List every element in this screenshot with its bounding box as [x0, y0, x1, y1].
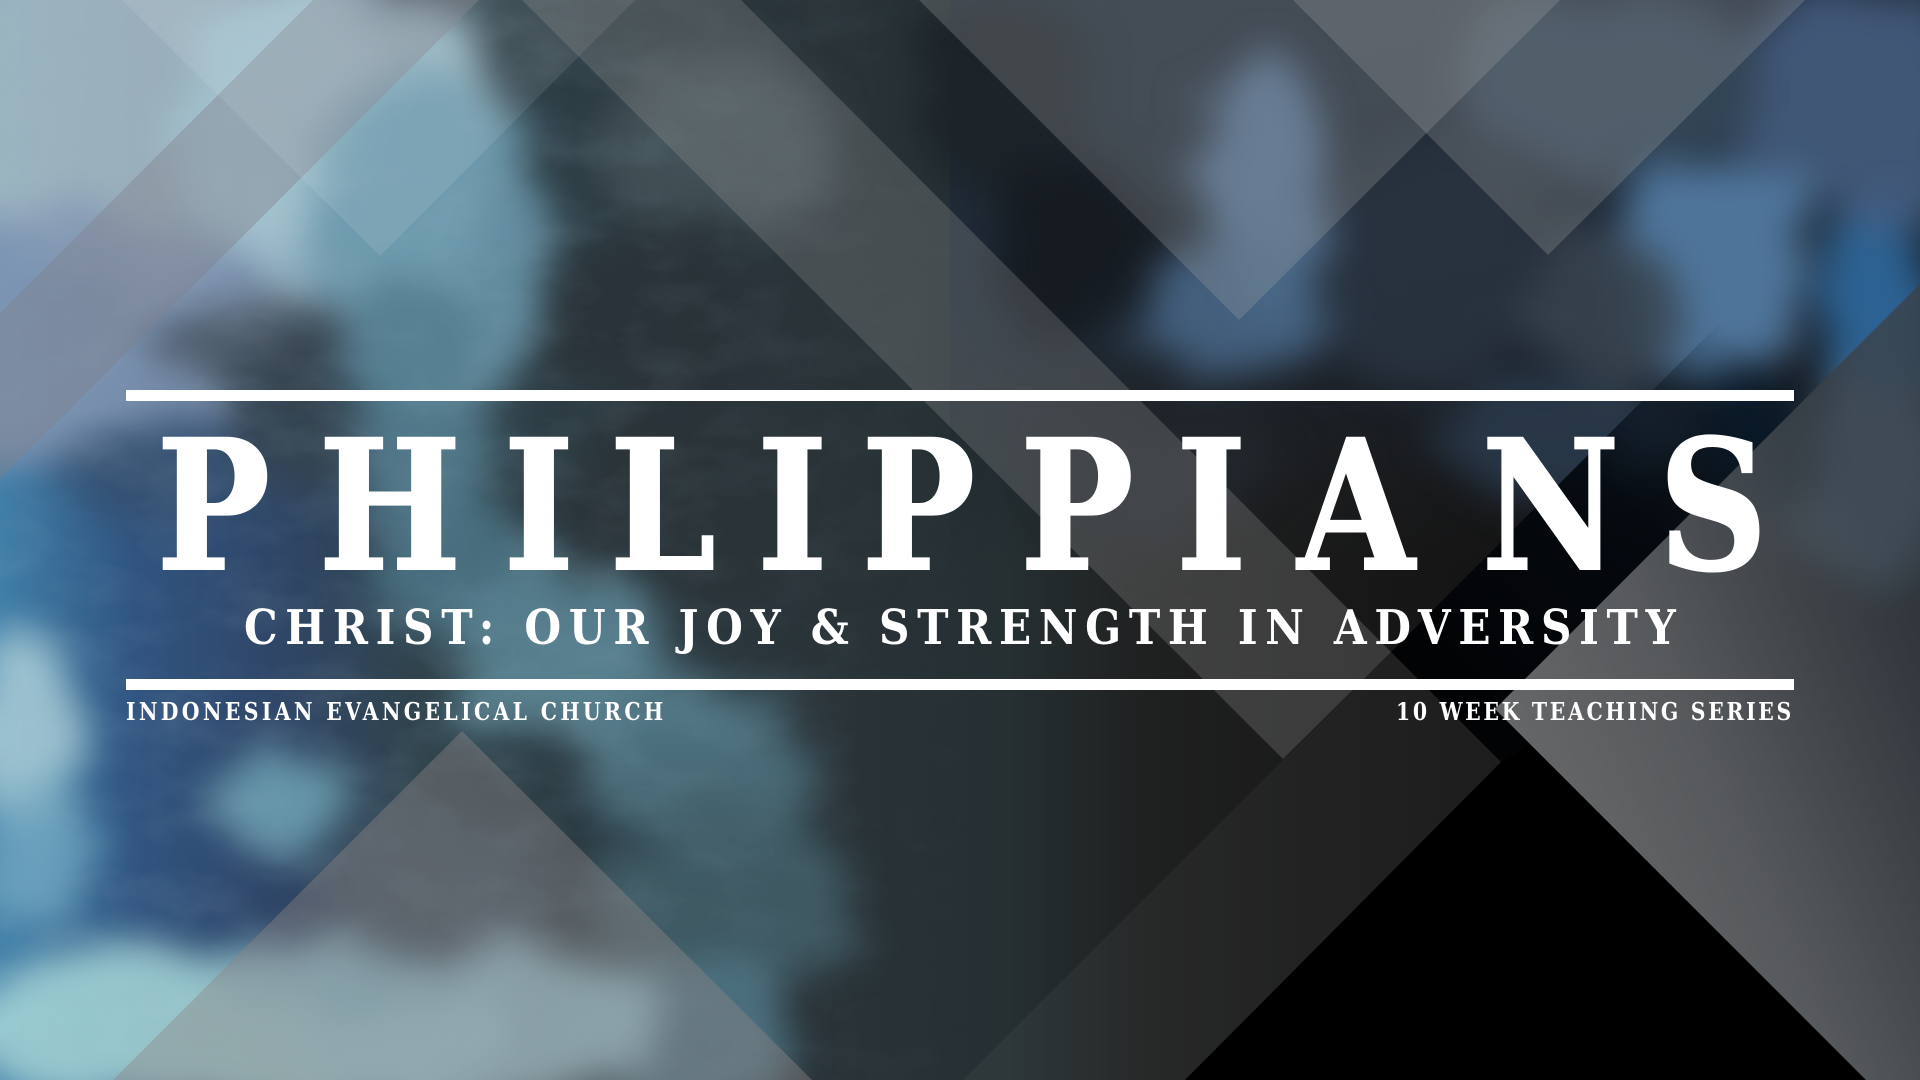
footer left: church name: INDONESIAN EVANGELICAL CHURCH: [126, 698, 663, 726]
overlay: diagonal grey band: [522, 0, 1391, 759]
overlay: lower chevron band: [1298, 652, 1500, 966]
overlay: bottom-left triangle: [113, 731, 812, 1080]
overlay: top centre triangle: [919, 0, 1560, 320]
overlay: upper-left triangle: [122, 0, 635, 256]
top rule: [126, 390, 1794, 401]
overlay: dark band: [1391, 333, 1728, 762]
title: PHILIPPIANS: [156, 401, 1768, 612]
subtitle: CHRIST: OUR JOY & STRENGTH IN ADVERSITY: [244, 599, 1676, 656]
cloud texture: [7, 21, 706, 914]
footer right: series length: 10 WEEK TEACHING SERIES: [1396, 698, 1791, 726]
overlay: top right triangle: [1293, 0, 1805, 255]
overlay: right grey triangle: [1495, 284, 1920, 1080]
overlay: upper-left grey band: [0, 0, 479, 479]
overlay: black lower triangle: [1185, 709, 1866, 1080]
bottom rule: [126, 679, 1794, 690]
